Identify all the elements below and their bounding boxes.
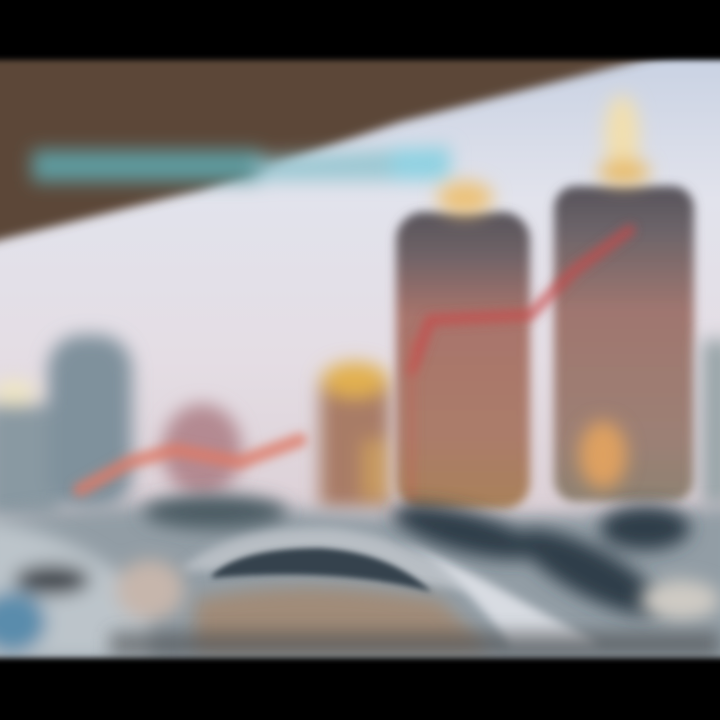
car: white car at right center — [400, 540, 600, 645]
frame: bottom black letterbox bar — [0, 658, 720, 720]
car: pale right car — [640, 580, 720, 620]
foreground: lower dark street edge — [110, 632, 720, 656]
building: far right edge — [702, 340, 720, 505]
car: dark mid-ground car — [143, 495, 287, 529]
car: dark right cars — [387, 493, 690, 631]
car: center pale roof — [180, 528, 470, 590]
icon: glow on central tower — [437, 181, 493, 215]
building: pink dome — [162, 404, 242, 496]
building: left blue-gray towers — [0, 335, 132, 520]
chart: blurred red trend line — [80, 230, 630, 500]
accent: orange glow at tower base — [579, 421, 627, 489]
building: right tall tower — [554, 95, 694, 502]
frame: top black letterbox bar — [0, 0, 720, 60]
building: orange-topped tower — [320, 362, 390, 508]
panel: brown diagonal banner — [0, 50, 680, 248]
foreground: street and cars — [0, 493, 720, 670]
icon: flame glow on right tower — [598, 95, 650, 185]
car: left foreground car — [0, 520, 184, 660]
car: center tan car body — [195, 588, 490, 650]
heading: blurred teal title bar — [32, 146, 450, 182]
building: central tall tower — [396, 181, 530, 510]
car: center windshield — [212, 548, 432, 592]
